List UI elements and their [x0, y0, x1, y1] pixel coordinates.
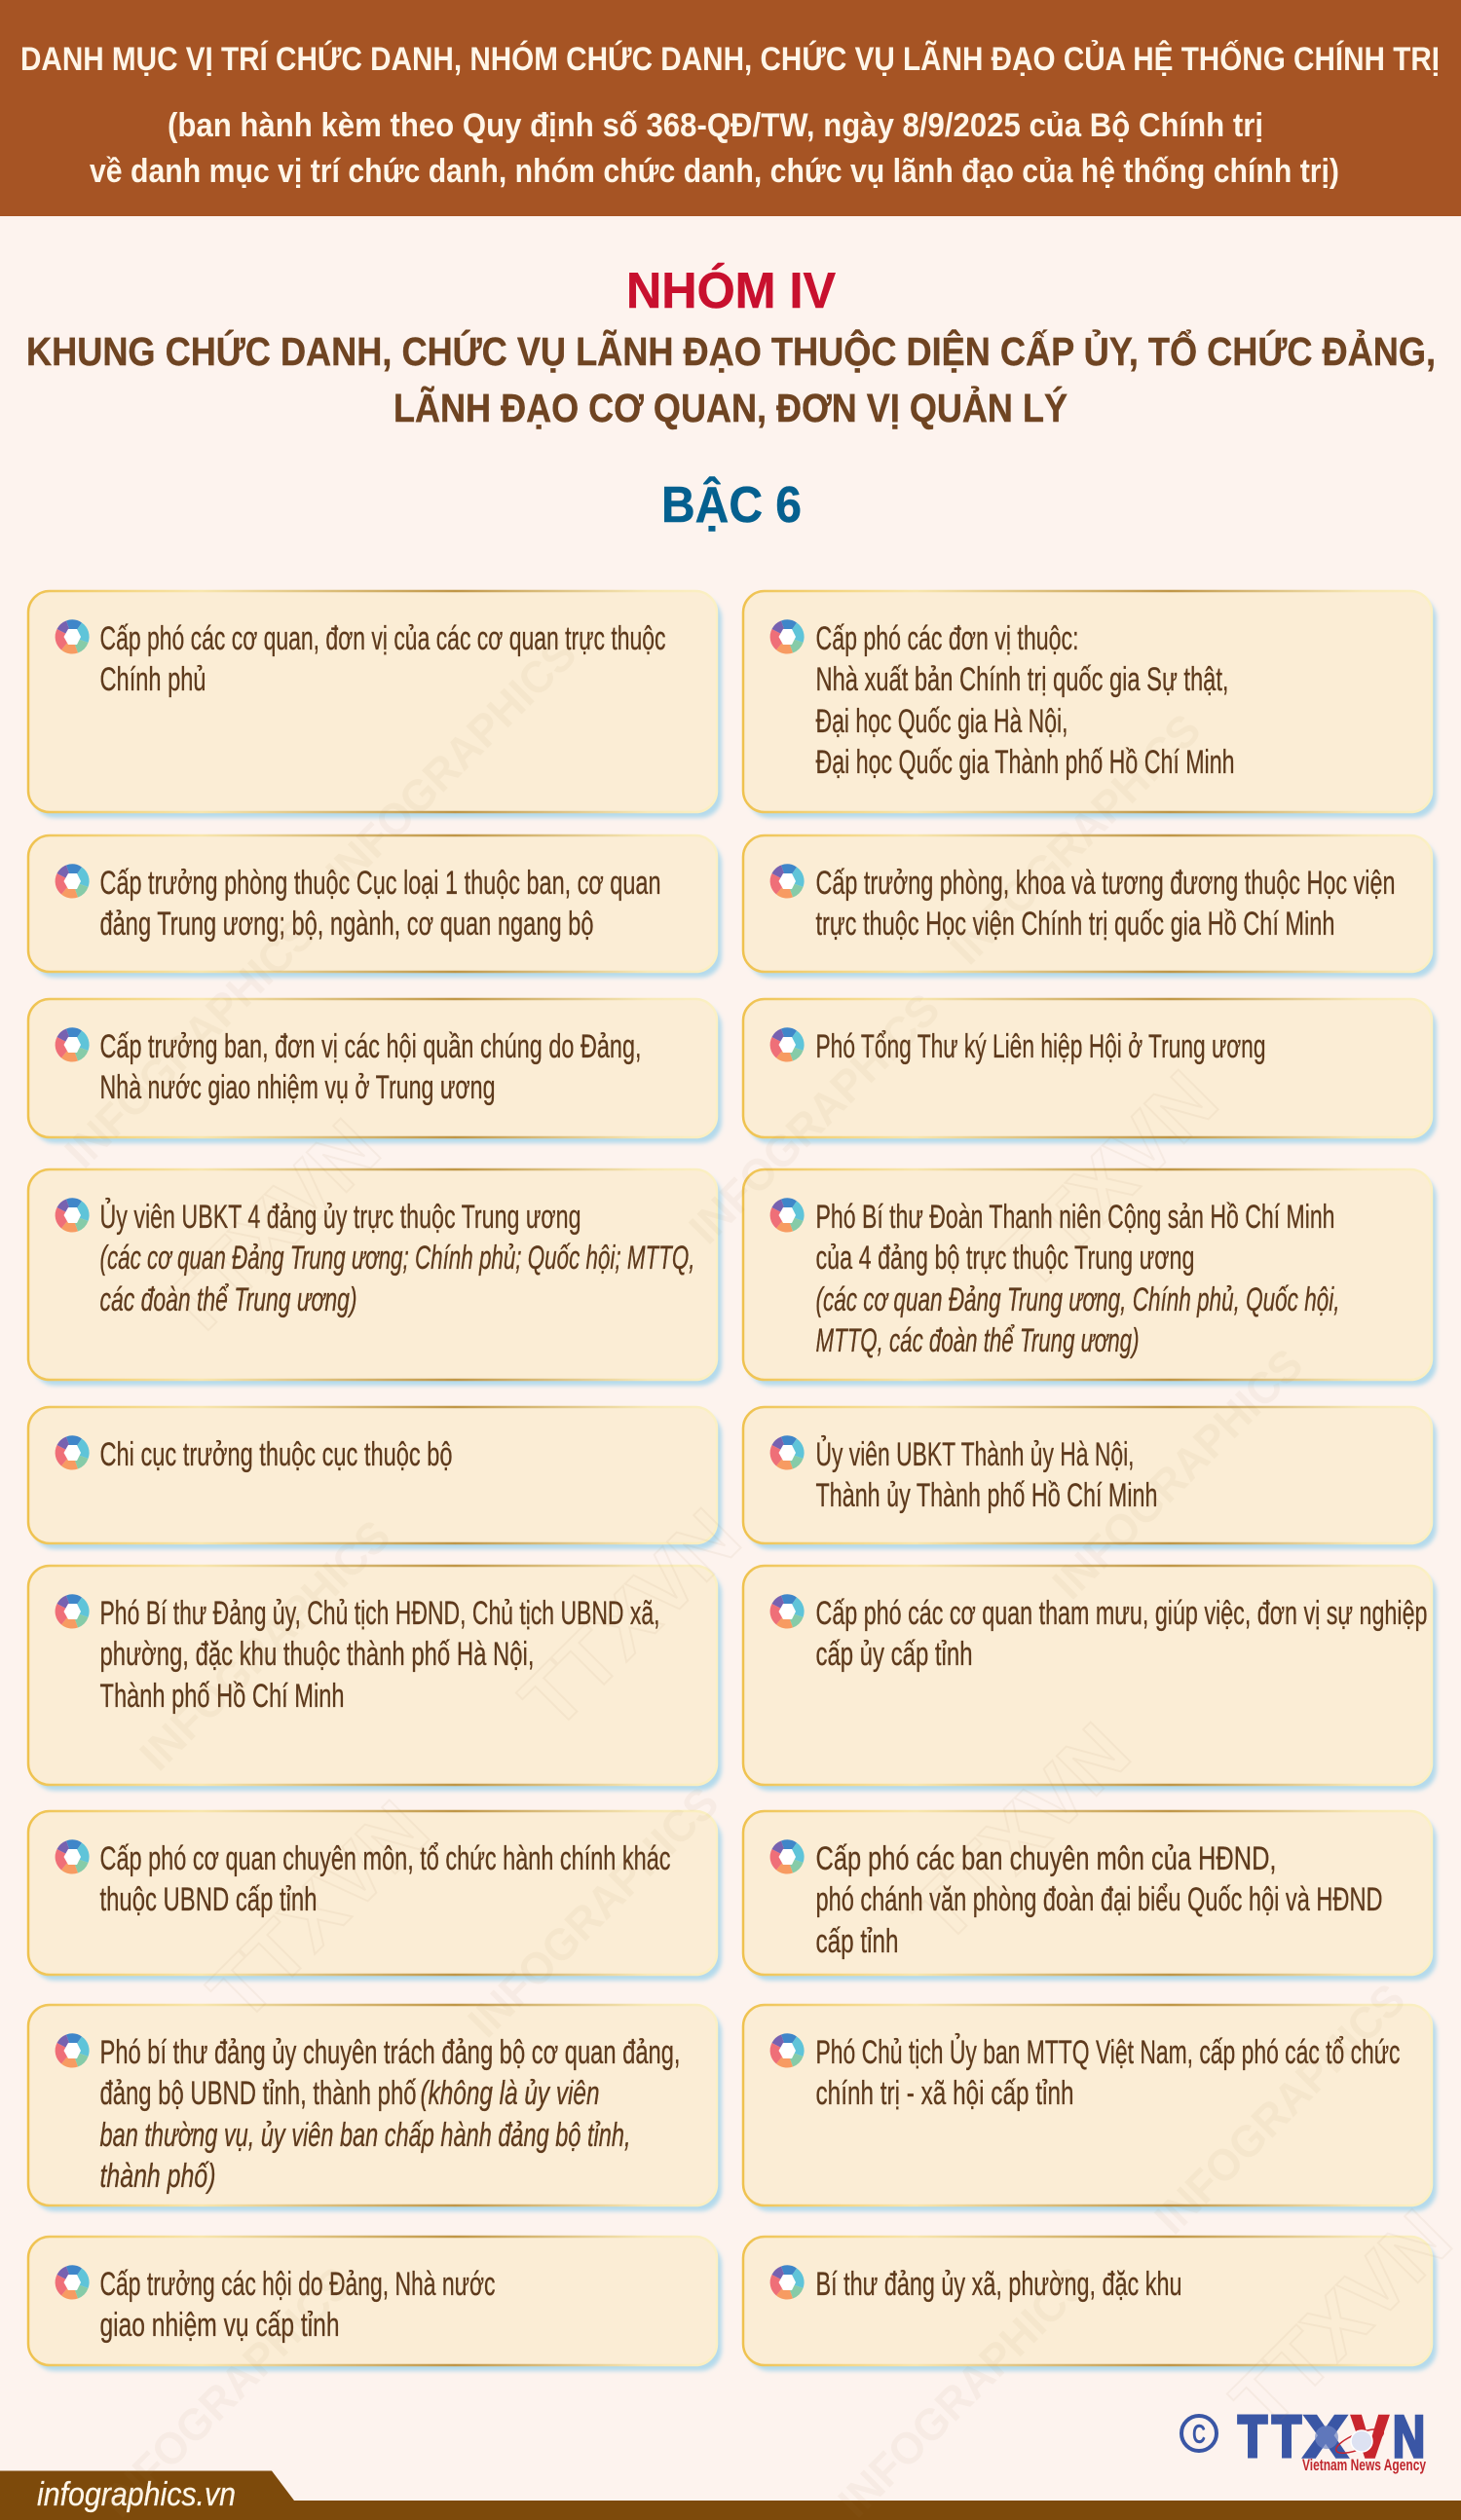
watermark — [55, 628, 1461, 2520]
heading: Bậc 6: BẬC 6 — [661, 476, 802, 534]
heading: group description: LÃNH ĐẠO CƠ QUAN, ĐƠN VỊ QUẢN LÝ — [393, 386, 1068, 430]
panel: row 8 right — [743, 2005, 1437, 2211]
watermark: INFOGRAPHICS — [1042, 1339, 1312, 1609]
text block: phường, đặc khu thuộc thành phố Hà Nội, — [99, 1636, 534, 1673]
text block — [816, 1199, 1340, 1359]
panel: row 4 right — [743, 1169, 1437, 1386]
heading: Nhóm IV: NHÓM IV — [626, 263, 836, 319]
panel: row 5 left — [28, 1407, 722, 1549]
text block: cấp ủy cấp tỉnh — [816, 1636, 972, 1673]
watermark: INFOGRAPHICS — [828, 2257, 1098, 2520]
text block: Nhà nước giao nhiệm vụ ở Trung ương — [99, 1069, 496, 1106]
watermark: TTXVN — [1214, 2193, 1461, 2447]
text block: thuộc UBND cấp tỉnh — [99, 1881, 318, 1918]
text block — [99, 1199, 695, 1318]
icon: aperture — [56, 864, 90, 899]
text block: Chi cục trưởng thuộc cục thuộc bộ — [99, 1436, 452, 1473]
icon: aperture — [56, 2265, 90, 2300]
text block: Ủy viên UBKT 4 đảng ủy trực thuộc Trung ương — [99, 1199, 581, 1236]
text block — [816, 1595, 1428, 1673]
text block: Phó Bí thư Đảng ủy, Chủ tịch HĐND, Chủ tịch UBND xã, — [99, 1595, 660, 1632]
watermark: INFOGRAPHICS — [92, 2257, 361, 2520]
watermark: TTXVN — [191, 1784, 445, 2038]
icon: aperture — [56, 1027, 90, 1062]
text block: đảng Trung ương; bộ, ngành, cơ quan ngang bộ — [99, 906, 594, 943]
watermark: INFOGRAPHICS — [940, 704, 1210, 974]
panel: row 7 right — [743, 1811, 1437, 1981]
header subtitle: (ban hành kèm theo Quy định số 368-QĐ/TW, ngày 8/9/2025 của Bộ Chính trị — [168, 107, 1263, 144]
watermark: INFOGRAPHICS — [130, 1510, 399, 1780]
text block: Phó bí thư đảng ủy chuyên trách đảng bộ cơ quan đảng, — [99, 2034, 680, 2071]
icon: aperture — [770, 1839, 805, 1874]
text block: Nhà xuất bản Chính trị quốc gia Sự thật, — [816, 661, 1229, 698]
text block: Chính phủ — [99, 661, 206, 698]
text block: (các cơ quan Đảng Trung ương; Chính phủ; Quốc hội; MTTQ, — [99, 1240, 695, 1277]
text block — [816, 2034, 1401, 2112]
text block — [99, 1028, 641, 1106]
text block: của 4 đảng bộ trực thuộc Trung ương — [816, 1240, 1194, 1277]
watermark: TTXVN — [503, 1492, 757, 1746]
icon: aperture — [770, 1594, 805, 1629]
text block — [816, 1840, 1383, 1960]
text block — [816, 1436, 1157, 1514]
header subtitle: về danh mục vị trí chức danh, nhóm chức danh, chức vụ lãnh đạo của hệ thống chính trị) — [90, 153, 1339, 190]
text block: Đại học Quốc gia Hà Nội, — [816, 703, 1068, 740]
panel: row 3 left — [28, 999, 722, 1143]
watermark: TTXVN — [892, 1706, 1146, 1960]
logo: TTXVN: V — [1352, 2404, 1388, 2469]
logo: TTXVN: T — [1238, 2404, 1267, 2469]
logo: TTXVN: N — [1393, 2404, 1425, 2469]
panel: row 9 right — [743, 2237, 1437, 2371]
text block: Ủy viên UBKT Thành ủy Hà Nội, — [816, 1436, 1134, 1473]
watermark: TTXVN — [980, 1054, 1234, 1308]
logo: TTXVN — [1238, 2404, 1427, 2474]
text block: Cấp phó cơ quan chuyên môn, tổ chức hành chính khác — [99, 1840, 670, 1877]
text block: (không là ủy viên — [421, 2075, 600, 2112]
text block: Thành ủy Thành phố Hồ Chí Minh — [816, 1477, 1157, 1514]
text block: Thành phố Hồ Chí Minh — [99, 1678, 345, 1715]
panel: row 7 left — [28, 1811, 722, 1981]
text block — [99, 2266, 495, 2344]
panel: row 2 right — [743, 835, 1437, 978]
watermark: INFOGRAPHICS — [1144, 1974, 1414, 2243]
panel: row 5 right — [743, 1407, 1437, 1549]
panel: row 4 left — [28, 1169, 722, 1386]
text block — [99, 620, 666, 698]
icon: aperture — [770, 864, 805, 899]
icon: aperture — [56, 619, 90, 654]
panel: row 1 right — [743, 591, 1437, 818]
text block: Cấp trưởng phòng thuộc Cục loại 1 thuộc ban, cơ quan — [99, 865, 660, 902]
copyright mark — [1181, 2416, 1217, 2451]
text block: các đoàn thể Trung ương) — [99, 1281, 356, 1318]
text block: cấp tỉnh — [816, 1923, 898, 1960]
icon: aperture — [770, 1198, 805, 1233]
icon: aperture — [56, 1435, 90, 1470]
text block: MTTQ, các đoàn thể Trung ương) — [816, 1322, 1140, 1359]
logo: TTXVN: T — [1272, 2404, 1301, 2469]
copyright mark: C — [1192, 2419, 1206, 2449]
watermark: INFOGRAPHICS — [55, 908, 324, 1177]
text block: Đại học Quốc gia Thành phố Hồ Chí Minh — [816, 744, 1235, 781]
watermark: TTXVN — [142, 1102, 396, 1356]
panel: row 8 left — [28, 2005, 722, 2211]
text block: Cấp phó các ban chuyên môn của HĐND, — [816, 1840, 1276, 1877]
text block — [99, 865, 660, 943]
text block: Cấp phó các đơn vị thuộc: — [816, 620, 1079, 657]
panel: row 6 left — [28, 1566, 722, 1791]
panel: row 9 left — [28, 2237, 722, 2371]
icon: aperture — [56, 1594, 90, 1629]
header band — [0, 0, 1461, 216]
panel: row 3 right — [743, 999, 1437, 1143]
text block — [99, 2034, 680, 2195]
icon: aperture — [770, 1435, 805, 1470]
header subtitle — [90, 107, 1339, 190]
icon: aperture — [56, 1839, 90, 1874]
footer bar — [0, 2471, 1461, 2520]
text block: giao nhiệm vụ cấp tỉnh — [99, 2307, 339, 2344]
icon: aperture — [56, 2033, 90, 2068]
text block — [99, 1840, 670, 1918]
icon: aperture — [770, 1027, 805, 1062]
text block: chính trị - xã hội cấp tỉnh — [816, 2075, 1073, 2112]
text block: Cấp trưởng các hội do Đảng, Nhà nước — [99, 2266, 495, 2303]
panel: row 2 left — [28, 835, 722, 978]
watermark: INFOGRAPHICS — [458, 1777, 728, 2047]
panel: row 1 left — [28, 591, 722, 818]
text block: Cấp trưởng ban, đơn vị các hội quần chúng do Đảng, — [99, 1028, 641, 1065]
logo: TTXVN: X — [1304, 2404, 1347, 2469]
text block: thành phố) — [99, 2158, 216, 2195]
text block: Bí thư đảng ủy xã, phường, đặc khu — [816, 2266, 1182, 2303]
icon: aperture — [770, 619, 805, 654]
panel: row 6 right — [743, 1566, 1437, 1791]
text block — [816, 865, 1395, 943]
heading: group description — [26, 328, 1436, 430]
icon: aperture — [770, 2033, 805, 2068]
footer site name: infographics.vn — [37, 2476, 236, 2513]
text block: ban thường vụ, ủy viên ban chấp hành đảng bộ tỉnh, — [99, 2117, 631, 2154]
watermark: INFOGRAPHICS — [316, 628, 585, 898]
icon: aperture — [56, 1198, 90, 1233]
text block: đảng bộ UBND tỉnh, thành phố — [99, 2075, 417, 2112]
text block — [816, 620, 1235, 781]
icon: aperture — [770, 2265, 805, 2300]
text block — [99, 1595, 660, 1715]
watermark: INFOGRAPHICS — [679, 983, 949, 1253]
text block: Cấp phó các cơ quan, đơn vị của các cơ quan trực thuộc — [99, 620, 666, 657]
